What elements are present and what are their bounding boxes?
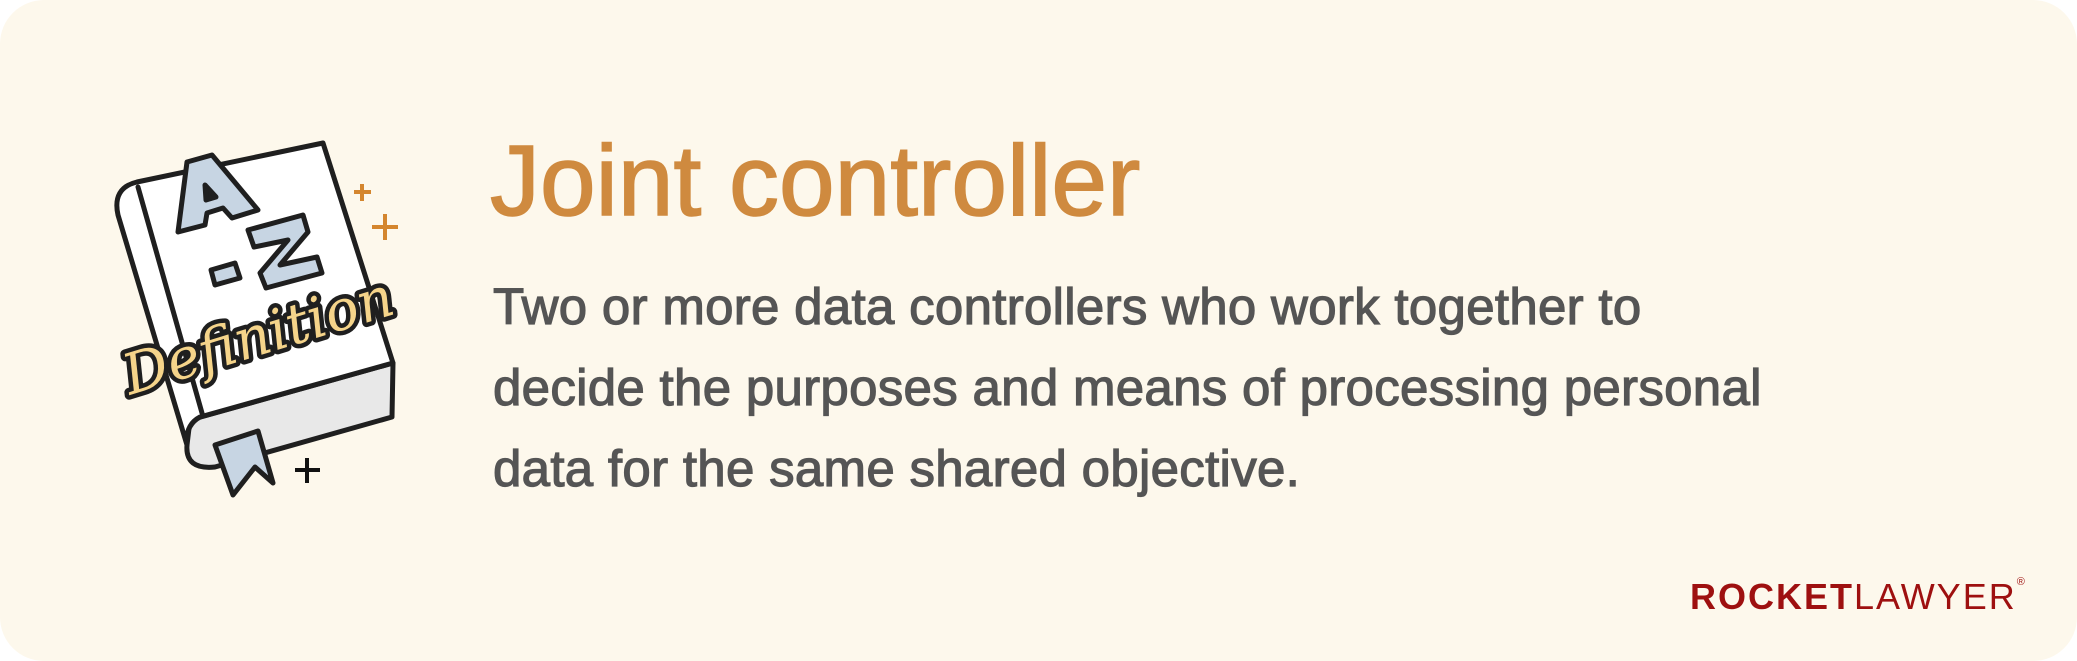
body text: decide the purposes and means of processing personal: [493, 359, 1762, 416]
icon: definition book: Definition: [114, 264, 401, 409]
logo: ROCKETLAWYER®: [1690, 576, 2027, 617]
title: Joint controller: [490, 125, 1140, 237]
body text: Two or more data controllers who work together to: [493, 278, 1642, 335]
icon: definition book: [114, 140, 401, 498]
body text: [493, 278, 1762, 498]
body text: data for the same shared objective.: [493, 440, 1300, 497]
